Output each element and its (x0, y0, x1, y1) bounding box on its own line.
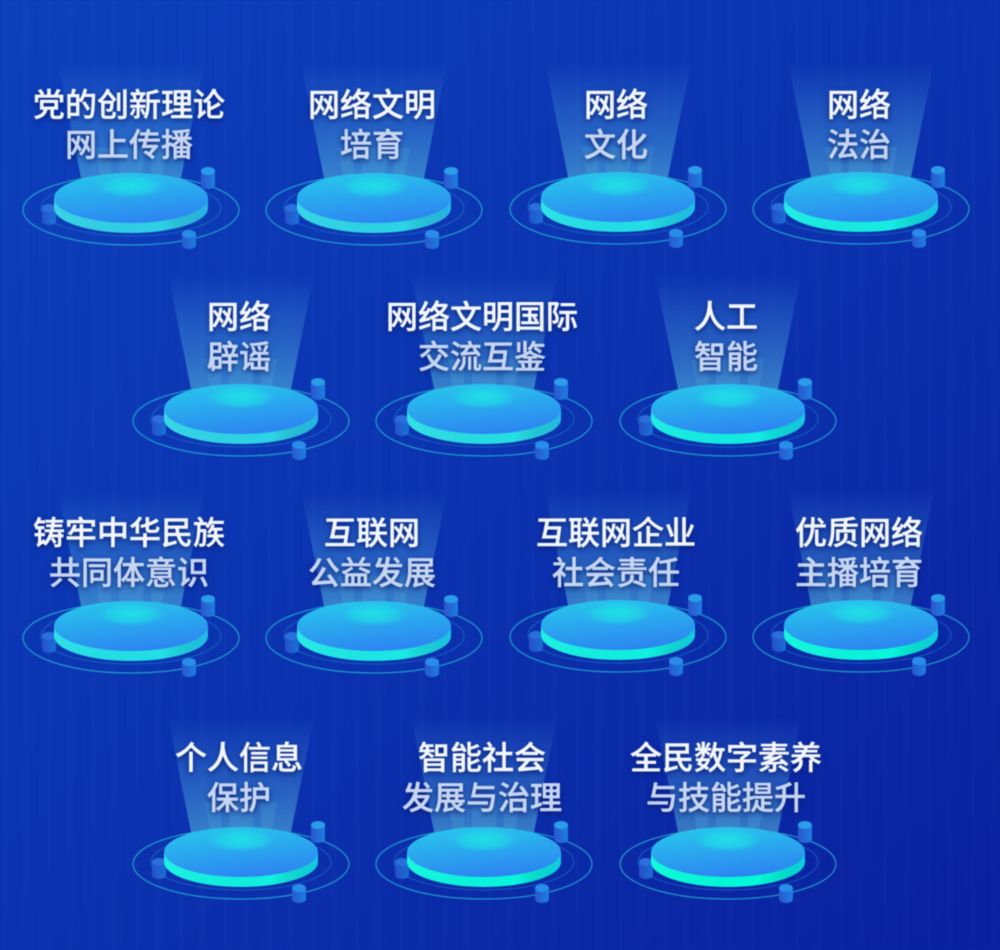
platform: 党的创新理论网上传播 (23, 63, 239, 249)
platform: 优质网络主播培育 (753, 490, 969, 676)
label: 优质网络主播培育: 主播培育 (795, 555, 923, 591)
label: 个人信息保护: 保护 (207, 780, 271, 816)
platform: 互联网企业社会责任 (510, 490, 726, 676)
label: 网络辟谣 (207, 299, 271, 375)
label: 网络文明国际交流互鉴: 网络文明国际 (386, 299, 578, 335)
label: 铸牢中华民族共同体意识: 共同体意识 (49, 555, 209, 591)
platform: 铸牢中华民族共同体意识 (23, 491, 239, 677)
platform: 网络法治 (753, 62, 969, 248)
label: 个人信息保护: 个人信息 (175, 740, 303, 776)
label: 互联网公益发展: 互联网 (324, 515, 420, 551)
label: 网络法治: 网络 (827, 87, 891, 123)
platform: 个人信息保护 (133, 717, 349, 903)
label: 党的创新理论网上传播 (33, 87, 225, 163)
platform: 网络文明国际交流互鉴 (376, 274, 592, 460)
platform: 全民数字素养与技能提升 (620, 717, 836, 903)
platform: 智能社会发展与治理 (376, 717, 592, 903)
label: 网络文化 (584, 87, 648, 163)
label: 智能社会发展与治理: 智能社会 (418, 740, 546, 776)
label: 网络文明国际交流互鉴: 交流互鉴 (418, 339, 546, 375)
label: 互联网企业社会责任 (536, 515, 696, 591)
label: 铸牢中华民族共同体意识 (33, 515, 225, 591)
label: 全民数字素养与技能提升: 与技能提升 (646, 780, 806, 816)
label: 网络文明培育: 网络文明 (308, 87, 436, 123)
platform: 人工智能 (620, 274, 836, 460)
label: 网络文明培育: 培育 (340, 127, 404, 163)
label: 人工智能: 智能 (694, 339, 758, 375)
label: 铸牢中华民族共同体意识: 铸牢中华民族 (33, 515, 225, 551)
label: 网络文化: 文化 (584, 127, 648, 163)
platform: 网络文明培育 (266, 63, 482, 249)
label: 党的创新理论网上传播: 党的创新理论 (33, 87, 225, 123)
label: 网络法治 (827, 87, 891, 163)
label: 全民数字素养与技能提升 (630, 740, 822, 816)
label: 个人信息保护 (175, 740, 303, 816)
label: 智能社会发展与治理 (402, 740, 562, 816)
label: 智能社会发展与治理: 发展与治理 (402, 780, 562, 816)
label: 互联网企业社会责任: 互联网企业 (536, 515, 696, 551)
label: 互联网公益发展: 公益发展 (308, 555, 436, 591)
label: 网络文明培育 (308, 87, 436, 163)
label: 网络法治: 法治 (827, 127, 891, 163)
label: 人工智能 (694, 299, 758, 375)
label: 党的创新理论网上传播: 网上传播 (65, 127, 193, 163)
platform: 网络文化 (510, 62, 726, 248)
platform: 互联网公益发展 (266, 491, 482, 677)
label: 互联网公益发展 (308, 515, 436, 591)
label: 人工智能: 人工 (694, 299, 758, 335)
label: 网络辟谣: 辟谣 (207, 339, 271, 375)
label: 网络文明国际交流互鉴 (386, 299, 578, 375)
label: 全民数字素养与技能提升: 全民数字素养 (630, 740, 822, 776)
label: 网络辟谣: 网络 (207, 299, 271, 335)
label: 优质网络主播培育 (795, 515, 923, 591)
label: 互联网企业社会责任: 社会责任 (552, 555, 680, 591)
label: 网络文化: 网络 (584, 87, 648, 123)
platform: 网络辟谣 (133, 274, 349, 460)
label: 优质网络主播培育: 优质网络 (795, 515, 923, 551)
